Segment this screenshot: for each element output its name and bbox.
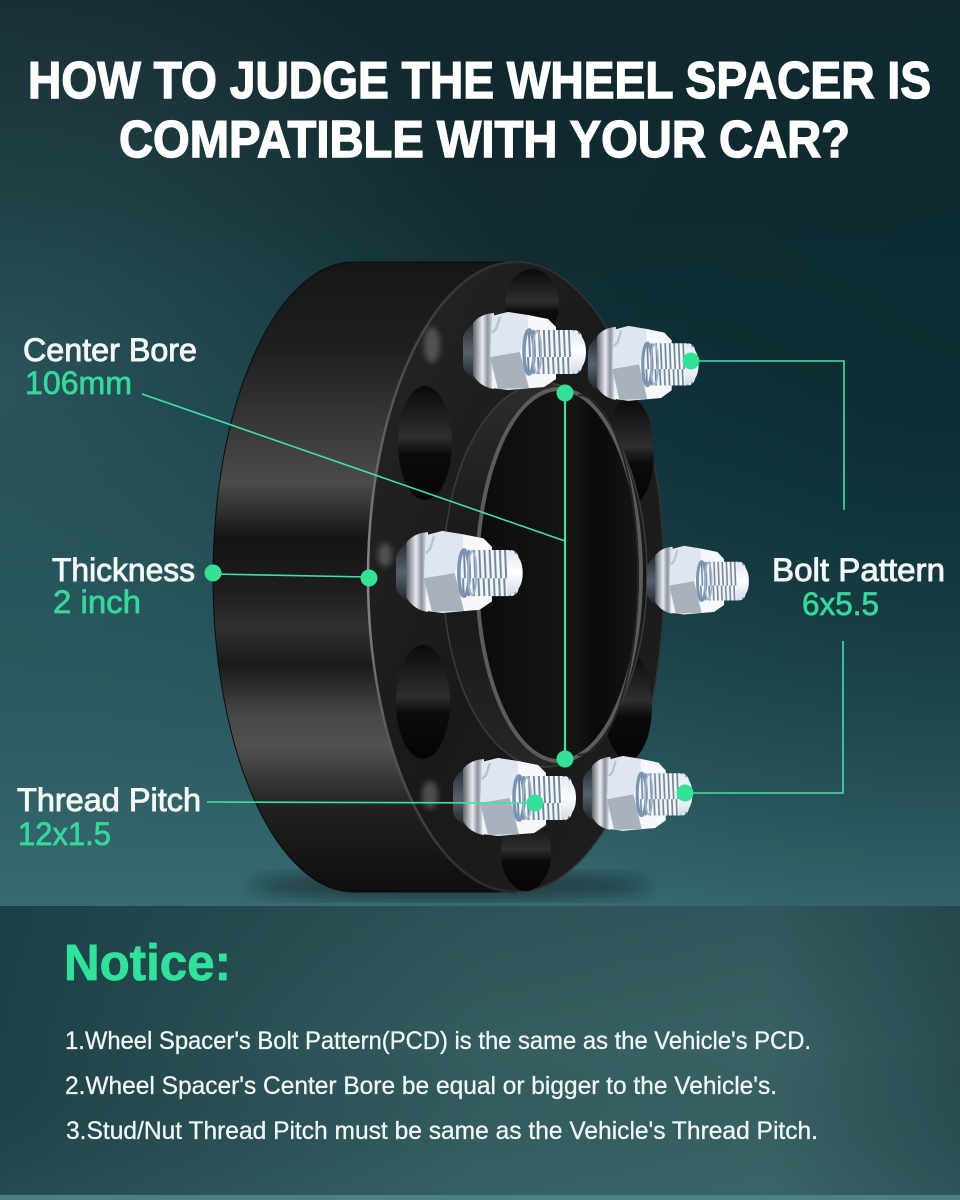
hub ring: [443, 383, 647, 767]
wheel spacer: [213, 262, 664, 892]
label: bolt pattern: 6x5.5: [802, 586, 879, 622]
face chamfer highlight: [368, 262, 516, 892]
bolt: upper right: [588, 326, 699, 401]
face gloss: [378, 327, 440, 809]
bolts: [396, 312, 749, 836]
label: thread pitch: [17, 782, 201, 852]
label: thickness: [52, 552, 195, 620]
notice list: [65, 1027, 818, 1145]
label: center bore: 106mm: [25, 365, 132, 401]
label: center bore: Center Bore: [23, 332, 197, 368]
spacer front face: [368, 262, 664, 892]
notice heading: Notice:: [64, 934, 231, 991]
title: [28, 52, 931, 169]
leader lines: [142, 361, 844, 803]
panel: notice: [0, 906, 960, 1195]
center bore: [477, 389, 641, 761]
label: center bore: [23, 332, 197, 401]
bolt: upper left: [463, 312, 586, 390]
title: COMPATIBLE WITH YOUR CAR?: [119, 111, 850, 169]
label: thickness: Thickness: [52, 552, 195, 588]
label: thickness: 2 inch: [53, 584, 141, 620]
notice list: 3.Stud/Nut Thread Pitch must be same as the Vehicle's Thread Pitch.: [66, 1117, 818, 1145]
lug holes: [396, 269, 654, 891]
marker dots: [204, 352, 700, 812]
notice list: 1.Wheel Spacer's Bolt Pattern(PCD) is the same as the Vehicle's PCD.: [65, 1027, 811, 1055]
label: bolt pattern: [772, 552, 945, 622]
bolt: lower right: [583, 756, 692, 831]
bolt: middle right: [647, 546, 749, 615]
label: bolt pattern: Bolt Pattern: [772, 552, 945, 588]
bolt: lower left: [453, 758, 576, 836]
notice list: 2.Wheel Spacer's Center Bore be equal or bigger to the Vehicle's.: [65, 1072, 777, 1100]
label: thread pitch: 12x1.5: [18, 816, 111, 852]
spacer body: [213, 262, 516, 892]
bore inner step: [578, 395, 638, 755]
ground shadow: [250, 872, 650, 900]
label: thread pitch: Thread Pitch: [17, 782, 201, 818]
bolt: middle left: [396, 531, 523, 613]
